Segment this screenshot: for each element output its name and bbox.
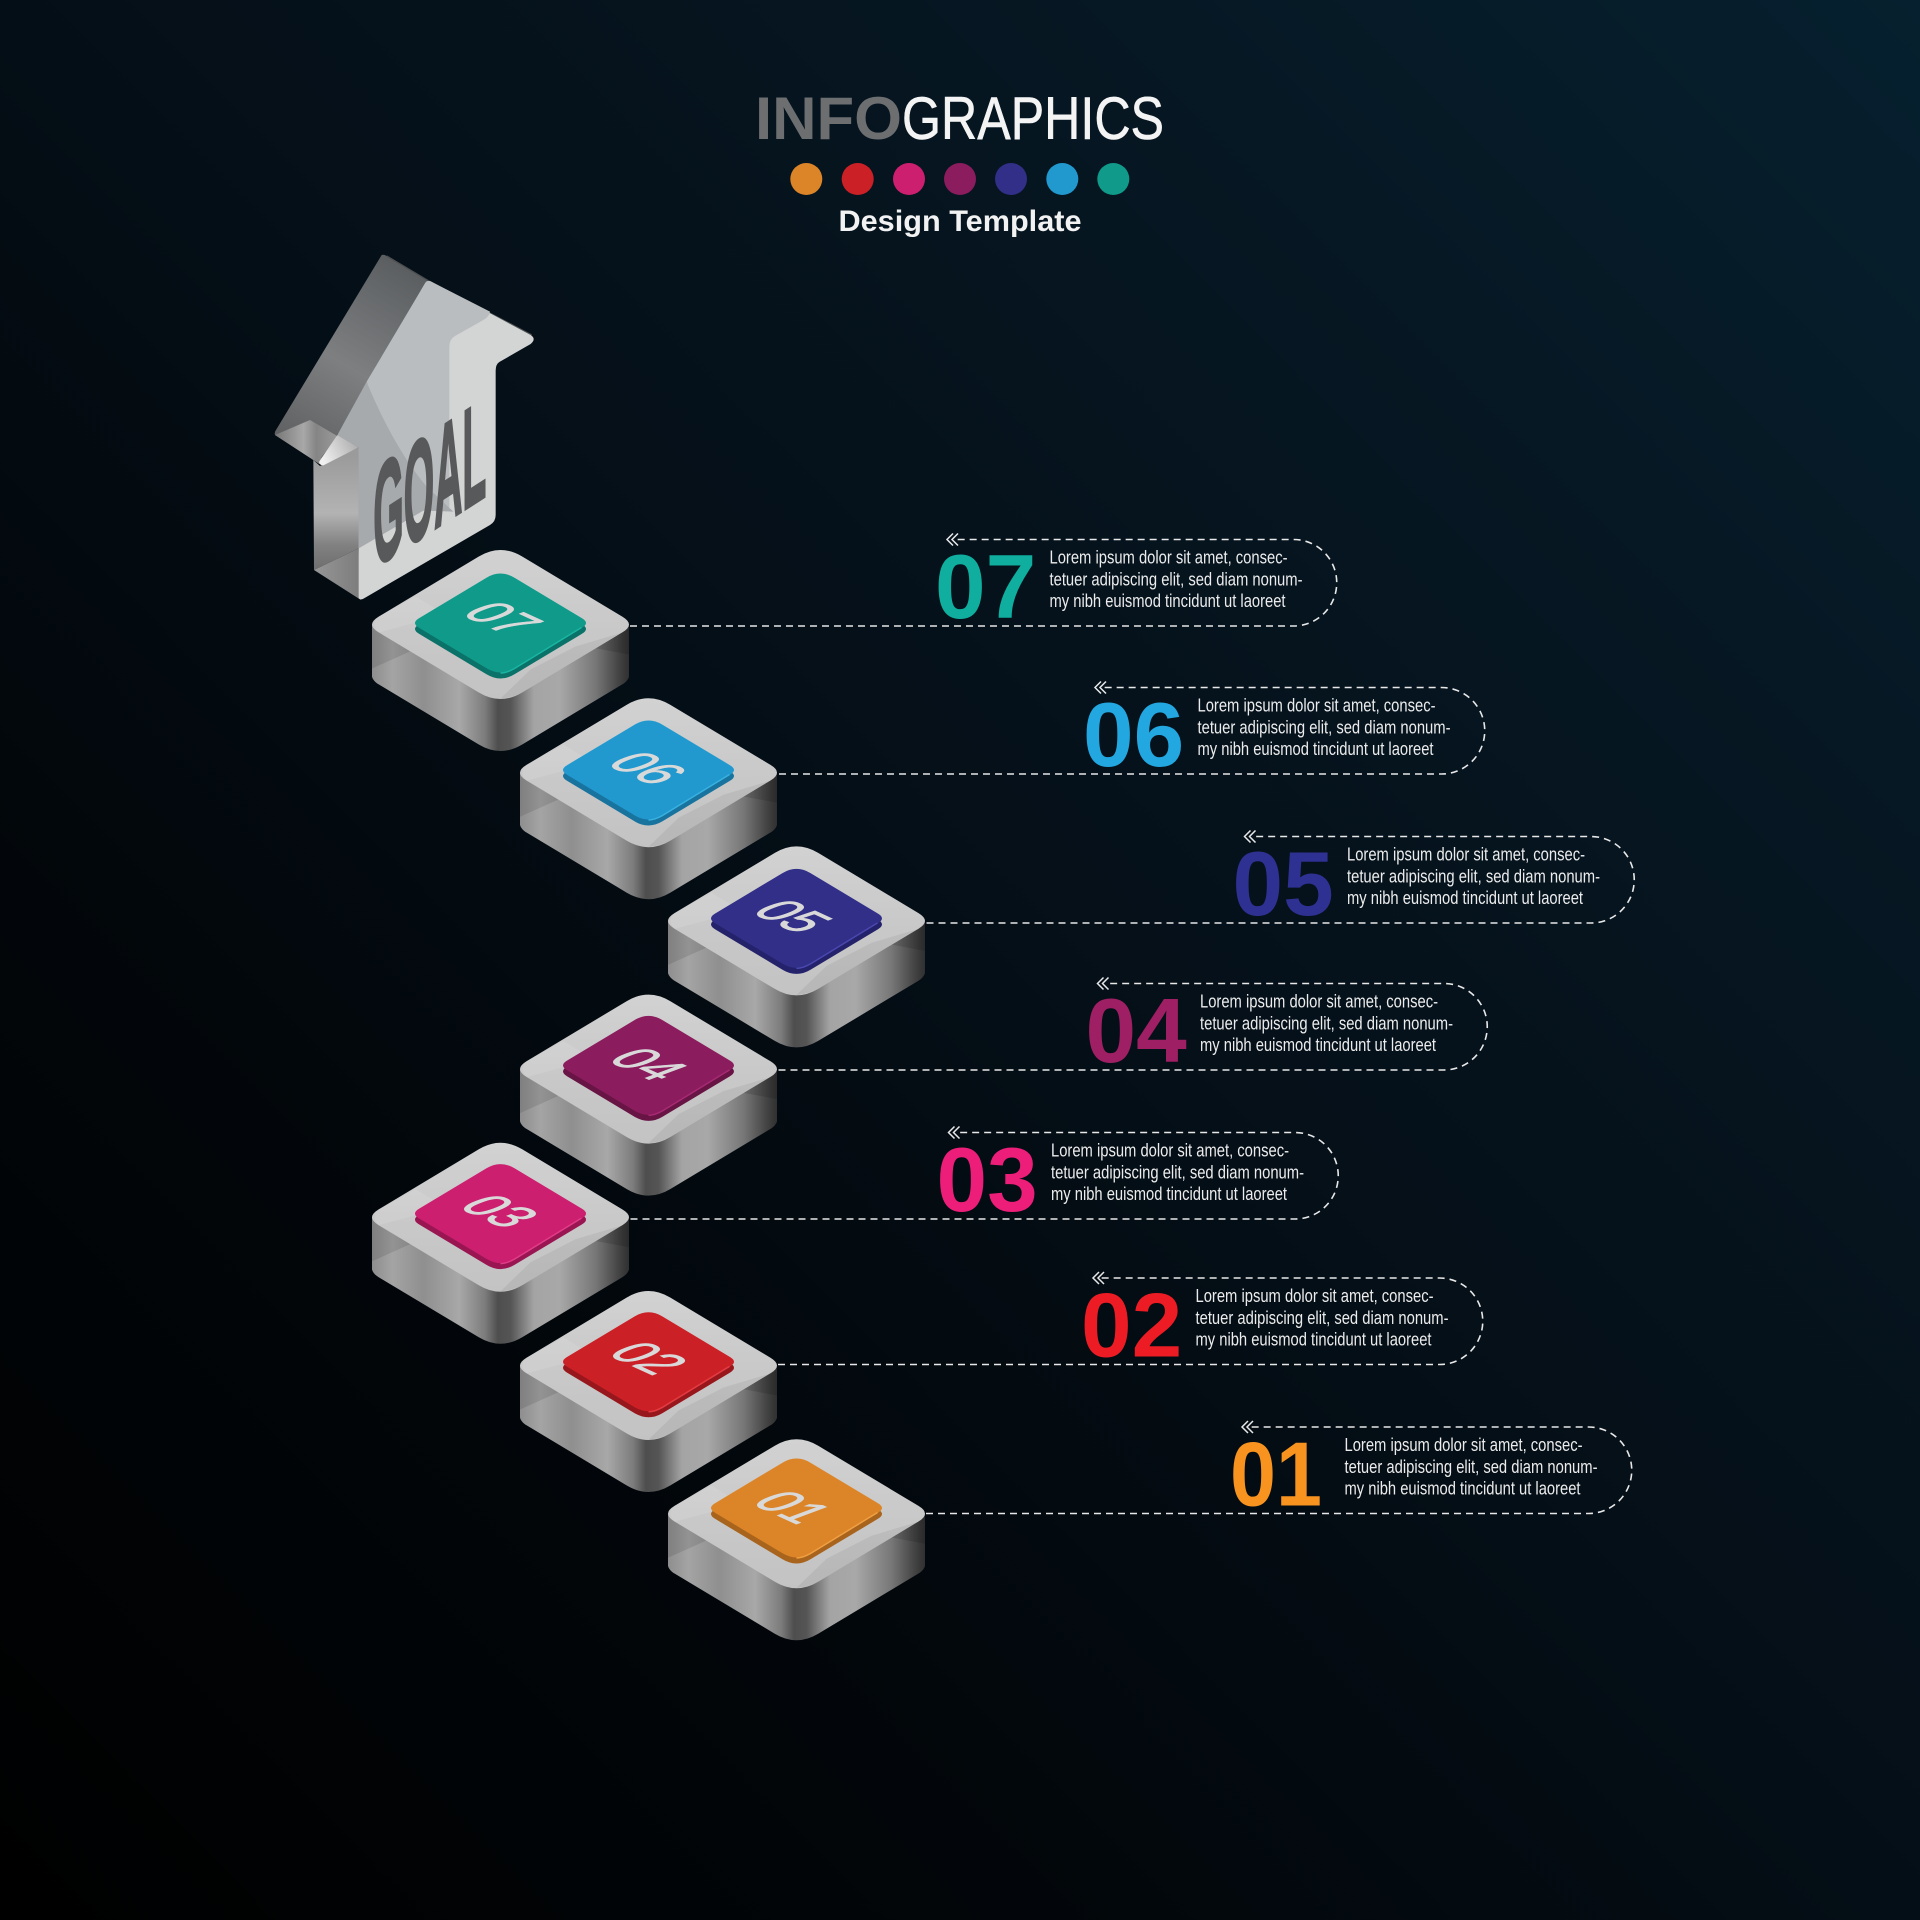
tile 05 [711,869,882,974]
callout 04: Lorem ipsum dolor sit amet, consec- [1200,990,1438,1012]
tile number 03: 03 [444,1189,553,1234]
callout 07: tetuer adipiscing elit, sed diam nonum- [1050,568,1302,590]
tile number 06: 06 [592,746,701,791]
callout 03: Lorem ipsum dolor sit amet, consec- [1051,1140,1289,1160]
step 03 block [372,1143,629,1344]
callout 04: 04 [1086,981,1187,1082]
step 01 block [668,1439,925,1640]
step 02 block [520,1291,777,1492]
callout 05: 05 [1232,834,1334,935]
callout 01: my nibh euismod tincidunt ut laoreet [1344,1478,1580,1498]
callout 06: tetuer adipiscing elit, sed diam nonum- [1198,716,1450,738]
callout 01: 01 [1230,1424,1322,1526]
callout 04 [778,978,1487,1082]
callout 03: 03 [936,1130,1038,1231]
step 06 block [520,698,777,899]
tile number 07: 07 [447,596,556,641]
tile 02 [563,1312,734,1417]
callout 03: my nibh euismod tincidunt ut laoreet [1051,1183,1287,1204]
tile 07 [415,574,586,678]
callout 02: tetuer adipiscing elit, sed diam nonum- [1196,1307,1448,1328]
tile 04 [563,1016,734,1121]
step 07 block [372,550,629,751]
tile number 02: 02 [593,1336,702,1381]
callout 06 [779,682,1485,786]
title: INFO [755,85,902,152]
callout 01: tetuer adipiscing elit, sed diam nonum- [1344,1456,1598,1477]
colour dots [790,163,1129,195]
callout 02: 02 [1081,1276,1182,1376]
callout 05 [926,830,1634,935]
callout 07 [630,534,1337,638]
step 05 block [668,846,925,1047]
callout 02 [778,1272,1483,1376]
callout 05: Lorem ipsum dolor sit amet, consec- [1347,844,1585,864]
subtitle: Design Template [838,205,1082,238]
callout 06: Lorem ipsum dolor sit amet, consec- [1198,694,1436,716]
tile number 05: 05 [737,894,846,939]
callout 01 [926,1421,1632,1526]
title [755,85,1164,152]
tile 03 [415,1164,586,1269]
callout 01: Lorem ipsum dolor sit amet, consec- [1344,1434,1582,1455]
tile 01 [711,1458,882,1564]
callout 02: my nibh euismod tincidunt ut laoreet [1196,1328,1432,1350]
tile number 01: 01 [737,1485,846,1530]
callout 07: 07 [935,537,1036,638]
tile number 04: 04 [593,1042,702,1087]
callout 04: tetuer adipiscing elit, sed diam nonum- [1200,1012,1453,1034]
callout 06: my nibh euismod tincidunt ut laoreet [1198,738,1434,759]
tile 06 [563,720,734,826]
title: GRAPHICS [902,85,1164,152]
callout 03: tetuer adipiscing elit, sed diam nonum- [1051,1162,1304,1182]
callout 04: my nibh euismod tincidunt ut laoreet [1200,1034,1436,1055]
callout 07: my nibh euismod tincidunt ut laoreet [1050,590,1286,611]
step 04 block [520,995,777,1196]
goal arrow: GOAL [373,369,486,599]
callout 07: Lorem ipsum dolor sit amet, consec- [1050,546,1288,568]
goal arrow [275,255,534,600]
callout 05: my nibh euismod tincidunt ut laoreet [1347,887,1583,908]
callout 05: tetuer adipiscing elit, sed diam nonum- [1347,866,1600,886]
callout 03 [630,1126,1338,1231]
callout 06: 06 [1083,685,1184,786]
callout 02: Lorem ipsum dolor sit amet, consec- [1196,1285,1434,1306]
